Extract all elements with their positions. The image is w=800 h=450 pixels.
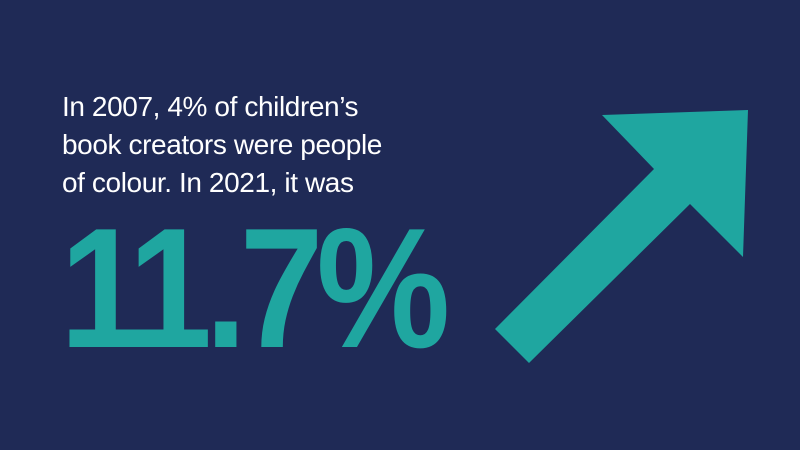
text block: intro: In 2007, 4% of children’s — [62, 91, 358, 122]
text block: intro — [62, 91, 382, 198]
text block: intro: book creators were people — [62, 129, 382, 160]
text block: intro: of colour. In 2021, it was — [62, 167, 354, 198]
big number: 11.7% — [60, 193, 443, 384]
